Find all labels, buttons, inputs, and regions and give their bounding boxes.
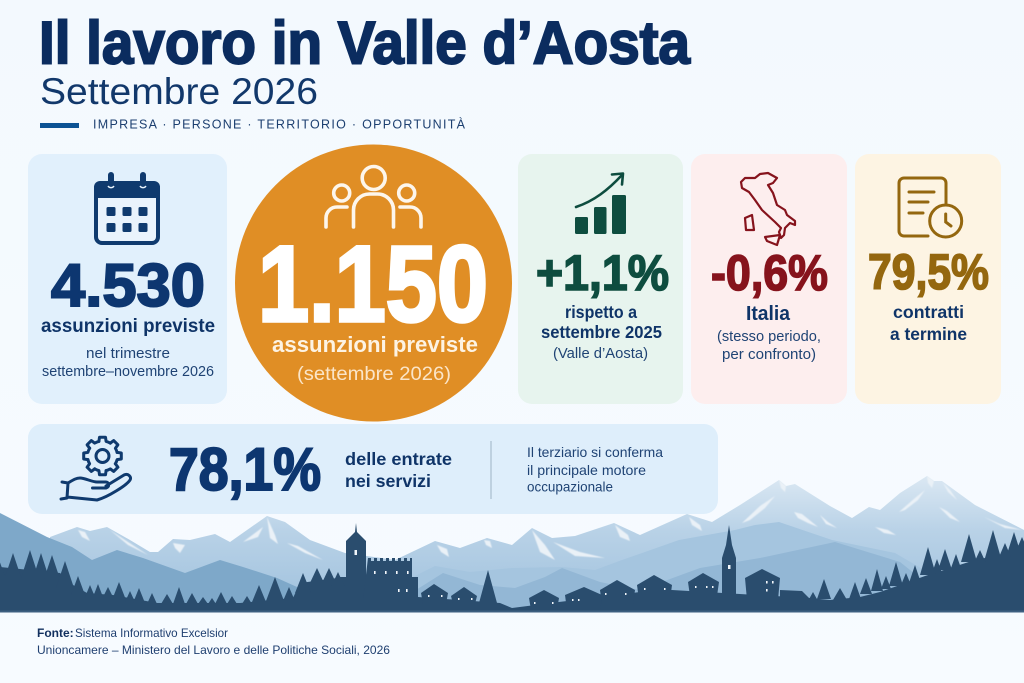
note: (Valle d’Aosta) [553, 345, 648, 362]
houses left [421, 584, 448, 604]
label [541, 302, 662, 342]
tagline: IMPRESA · PERSONE · TERRITORIO · OPPORTUNITÀ [93, 116, 466, 132]
figure: +1,1%: +1,1% [536, 245, 669, 301]
icon: gear on open hand [61, 437, 131, 500]
dark forest, castle and village silhouette [0, 523, 1024, 612]
note [717, 328, 821, 363]
panel: yearly change [518, 154, 683, 404]
subtitle: Settembre 2026 [40, 71, 318, 112]
source footer [37, 626, 390, 657]
label: settembre 2025 [541, 322, 662, 342]
landscape: Alpine mountains, castle, village and forest [0, 476, 1024, 612]
source footer: Fonte: [37, 626, 74, 640]
note [527, 444, 663, 494]
label: Italia [746, 303, 791, 325]
source footer: Sistema Informativo Excelsior [75, 626, 228, 640]
note: nel trimestre [86, 346, 170, 362]
houses right [529, 590, 559, 610]
icon: map of Italy [741, 173, 795, 245]
note: settembre–novembre 2026 [42, 364, 214, 380]
figure: 1.150: 1.150 [258, 223, 488, 344]
figure: 4.530: 4.530 [51, 252, 205, 319]
icon: calendar [94, 175, 160, 243]
title: Il lavoro in Valle d’Aosta [39, 10, 691, 76]
icon: rising bars with arrow [575, 174, 626, 234]
figure: 79,5%: 79,5% [868, 244, 989, 300]
label: assunzioni previste [272, 332, 478, 357]
middle range [380, 522, 1024, 612]
note: occupazionale [527, 478, 613, 494]
accent rule [40, 123, 79, 128]
label [345, 449, 452, 491]
note: (stesso periodo, [717, 328, 821, 345]
panel: central orange circle, September hires [235, 144, 512, 422]
label: rispetto a [565, 302, 637, 322]
castle tower [346, 523, 366, 600]
panel: Italy comparison [691, 154, 847, 404]
figure: -0,6%: -0,6% [711, 245, 828, 301]
castle wall with battlements [363, 558, 412, 600]
nearer blue ridge, left [0, 513, 310, 612]
label: nei servizi [345, 471, 431, 491]
note: Il terziario si conferma [527, 444, 663, 460]
source footer: Unioncamere – Ministero del Lavoro e delle Politiche Sociali, 2026 [37, 643, 390, 657]
nearer blue ridge, right [400, 542, 935, 612]
horizon line [0, 610, 1024, 612]
panel: quarterly hires [28, 154, 227, 404]
panel: fixed-term contracts [855, 154, 1001, 404]
figure: 78,1%: 78,1% [169, 436, 321, 503]
note: per confronto) [722, 346, 816, 363]
label: delle entrate [345, 449, 452, 469]
far snowy mountains [50, 476, 1024, 612]
note: (settembre 2026) [297, 364, 451, 385]
note: il principale motore [527, 462, 646, 478]
note [42, 346, 214, 380]
panel: services banner [28, 424, 718, 514]
label: contratti [893, 302, 964, 322]
label [890, 302, 967, 344]
label: a termine [890, 324, 967, 344]
icon: group of people [326, 166, 421, 227]
icon: document with clock [899, 178, 962, 237]
snow patches [78, 476, 1022, 560]
lit windows [354, 550, 774, 604]
church bell tower [722, 525, 736, 600]
label: assunzioni previste [41, 316, 215, 337]
